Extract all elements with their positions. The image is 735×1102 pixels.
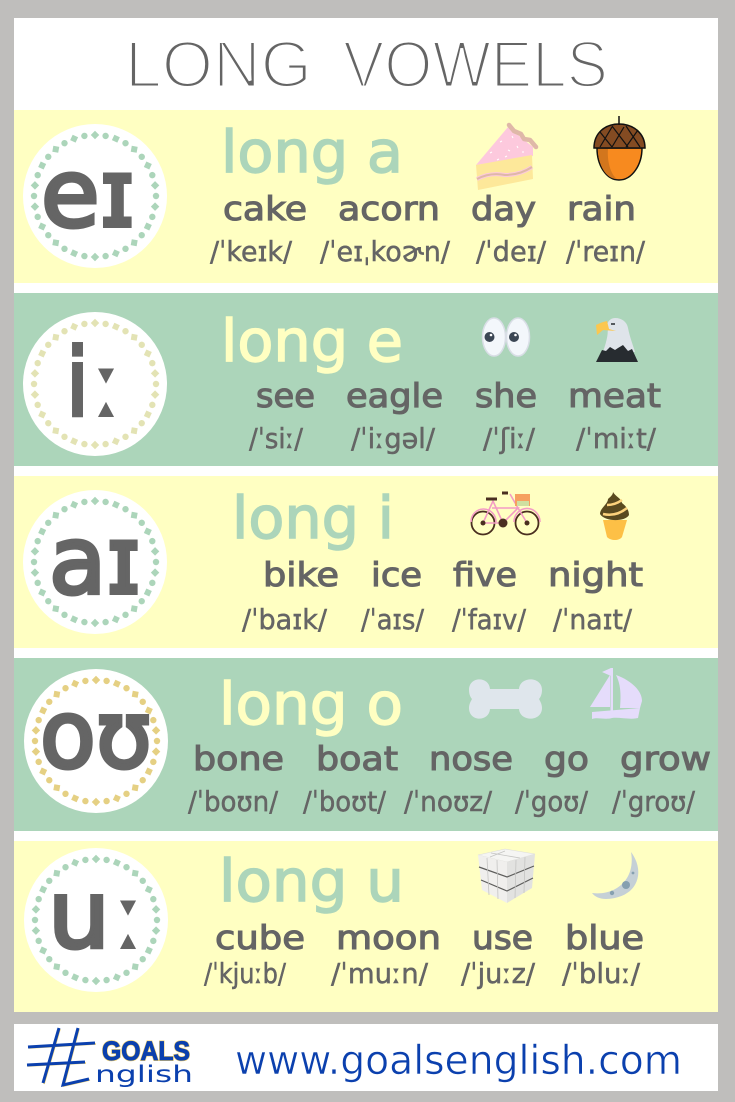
badge: uː: u <box>48 861 110 970</box>
word: eagle: eagle <box>346 376 443 415</box>
phonetic: faɪv: /ˈfaɪv/ <box>452 603 527 636</box>
heading: long a: long a <box>221 118 403 186</box>
logo <box>27 1028 193 1088</box>
title: LONG <box>125 27 312 101</box>
phonetic: siː: /ˈsiː/ <box>249 422 304 455</box>
badge: oʊ: oʊ <box>40 681 152 790</box>
badge: uː: ː <box>115 863 146 972</box>
icon: acorn <box>594 116 645 180</box>
panel: long i <box>14 476 718 648</box>
phonetic: groʊ: /ˈgroʊ/ <box>612 785 696 818</box>
badge: uː <box>24 848 168 992</box>
phonetic: muːn: /ˈmuːn/ <box>331 957 429 990</box>
word: acorn: acorn <box>338 189 440 228</box>
phonetic: deɪ: /ˈdeɪ/ <box>476 235 547 268</box>
phonetic: miːt: /ˈmiːt/ <box>576 422 657 455</box>
phonetic: juːz: /ˈjuːz/ <box>461 957 536 990</box>
logo: GOALS <box>102 1036 190 1066</box>
panel: long o <box>14 658 718 831</box>
heading: long o: long o <box>219 670 403 738</box>
phonetic: kjuːb: /ˈkjuːb/ <box>204 957 286 990</box>
word: blue: blue <box>565 918 644 957</box>
word: go: go <box>544 739 589 778</box>
icon: bone <box>469 679 542 719</box>
word: grow: grow <box>620 739 711 778</box>
icon: cake <box>476 125 536 190</box>
word: day: day <box>471 189 536 228</box>
word: boat: boat <box>316 739 398 778</box>
word: rain: rain <box>567 189 636 228</box>
word: bike: bike <box>263 555 339 594</box>
word: ice: ice <box>371 555 422 594</box>
phonetic: ʃiː: /ˈʃiː/ <box>483 422 536 455</box>
icon: ice cream <box>600 492 629 540</box>
word: bone: bone <box>193 739 284 778</box>
icon: sailboat <box>590 668 642 719</box>
badge: oʊ <box>24 669 168 813</box>
title <box>125 27 608 101</box>
word: cake: cake <box>223 189 307 228</box>
word: cube: cube <box>215 918 305 957</box>
logo: GOALS <box>102 1036 190 1066</box>
word: meat: meat <box>568 376 661 415</box>
phonetic: keɪk: /ˈkeɪk/ <box>210 235 293 268</box>
phonetic: boʊn: /ˈboʊn/ <box>188 785 279 818</box>
phonetic: reɪn: /ˈreɪn/ <box>566 235 646 268</box>
phonetic: boʊt: /ˈboʊt/ <box>303 785 387 818</box>
phonetic: aɪs: /ˈaɪs/ <box>361 603 425 636</box>
phonetic: eɪkoɚn: /ˈeɪˌkoɚn/ <box>320 235 451 268</box>
phonetic: goʊ: /ˈgoʊ/ <box>515 785 589 818</box>
icon: eyes <box>482 318 530 356</box>
panel: long u <box>14 841 718 1012</box>
footer <box>14 1024 718 1091</box>
phonetic: bluː: /ˈbluː/ <box>562 957 641 990</box>
phonetic: iːgəl: /ˈiːgəl/ <box>351 422 436 455</box>
icon: bicycle <box>471 493 540 534</box>
badge: iː: i <box>66 329 89 438</box>
logo: nglish <box>95 1062 193 1088</box>
panel: long e <box>14 293 718 466</box>
phonetic: baɪk: /ˈbaɪk/ <box>242 603 328 636</box>
badge: iː: ː <box>93 331 124 440</box>
word: use: use <box>472 918 533 957</box>
word: see: see <box>256 376 315 415</box>
website url: www.goalsenglish.com <box>235 1038 682 1084</box>
phonetic: naɪt: /ˈnaɪt/ <box>553 603 633 636</box>
word: nose: nose <box>429 739 513 778</box>
word: moon: moon <box>336 918 441 957</box>
icon: cube <box>478 849 535 903</box>
icon: eagle <box>596 318 638 362</box>
word: night: night <box>548 555 643 594</box>
icon: moon <box>592 852 638 899</box>
badge: eɪ <box>23 124 167 268</box>
badge: aɪ <box>23 490 167 634</box>
phonetic: noʊz: /ˈnoʊz/ <box>404 785 493 818</box>
word: she: she <box>475 376 537 415</box>
badge: eɪ: eɪ <box>41 140 135 249</box>
word: five: five <box>453 555 517 594</box>
heading: long e: long e <box>221 307 403 375</box>
heading: long u: long u <box>219 847 404 915</box>
badge: aɪ: aɪ <box>49 507 141 616</box>
panel: long a <box>14 110 718 283</box>
heading: long i: long i <box>232 484 394 552</box>
title: VOWELS <box>343 27 608 101</box>
badge: iː <box>23 312 167 456</box>
